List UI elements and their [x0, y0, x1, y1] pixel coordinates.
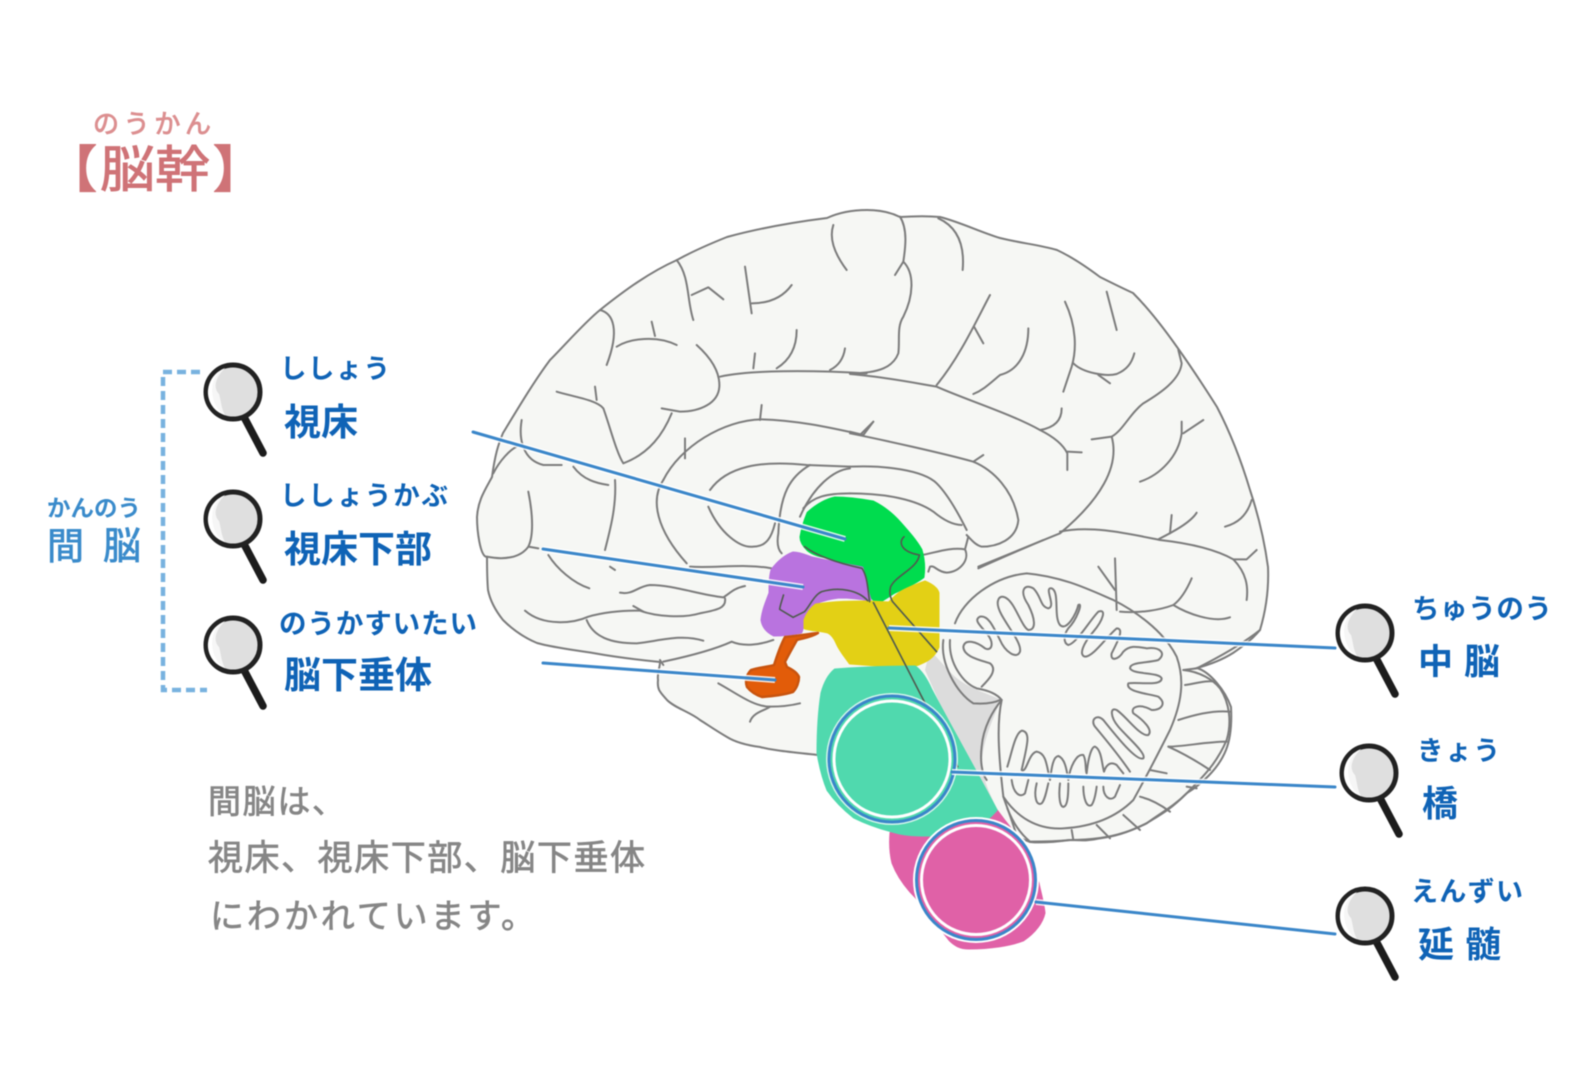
- brain silhouette: [477, 210, 1268, 842]
- magnifier icon: medulla: [1338, 889, 1395, 977]
- cerebellum: [943, 540, 1260, 842]
- region: hypothalamus: [762, 553, 870, 635]
- note text: [208, 783, 645, 936]
- note text: 視床、視床下部、脳下垂体: [208, 839, 645, 878]
- magnifier icon: hypothalamus: [206, 492, 263, 580]
- label: pituitary: のうかすいたい: [279, 608, 477, 639]
- leader line: medulla: [1036, 902, 1335, 934]
- region: medulla body: [891, 810, 1044, 948]
- leader line: pons: [952, 772, 1335, 787]
- label: thalamus: [280, 354, 390, 443]
- title: のうかん: [93, 109, 211, 139]
- label: pons: [1417, 736, 1500, 824]
- sulci: back and top: [850, 217, 1257, 600]
- region: pituitary: [746, 633, 818, 697]
- note text: 間脳は、: [208, 783, 345, 820]
- fourth ventricle grey area: [925, 650, 1016, 850]
- label: medulla: 延: [1418, 924, 1454, 965]
- label: medulla: [1411, 877, 1523, 965]
- label: diencephalon: 間: [47, 526, 84, 567]
- title: [47, 109, 263, 198]
- title: 【: [47, 142, 97, 198]
- label: midbrain: 中: [1418, 643, 1453, 682]
- label: medulla: 髄: [1465, 924, 1501, 965]
- diencephalon bracket: [163, 372, 207, 690]
- title: 脳幹: [100, 142, 210, 198]
- note text: にわかれています。: [210, 898, 535, 936]
- sulci: front and top: [487, 225, 873, 563]
- label: thalamus: ししょう: [280, 354, 390, 384]
- label: pons: きょう: [1417, 736, 1500, 766]
- leader line: hypothalamus: [543, 549, 803, 587]
- label: medulla: えんずい: [1411, 877, 1523, 907]
- label: midbrain: 脳: [1464, 641, 1500, 682]
- label: diencephalon: [47, 495, 141, 568]
- label: midbrain: [1412, 593, 1552, 682]
- magnifier icon: midbrain: [1338, 606, 1395, 694]
- label: pituitary: 脳下垂体: [284, 655, 432, 696]
- label: hypothalamus: 視床下部: [284, 529, 432, 570]
- brain illustration: [477, 210, 1268, 948]
- region: pons body: [818, 667, 996, 835]
- magnified circle: pons: [826, 693, 958, 825]
- magnifier icon: thalamus: [206, 365, 263, 453]
- label: pituitary: [279, 608, 477, 696]
- region: thalamus: [801, 498, 924, 603]
- leader line: pituitary: [543, 663, 775, 680]
- sulci: lower frontal and temporal: [525, 555, 800, 722]
- internal lines over coloured regions: [780, 537, 958, 767]
- magnifier icon: pons: [1342, 746, 1399, 834]
- label: hypothalamus: ししょうかぶ: [280, 481, 448, 511]
- label: diencephalon: 脳: [103, 526, 141, 568]
- leader line: thalamus: [473, 432, 845, 539]
- label: hypothalamus: [280, 481, 448, 570]
- label: pons: 橋: [1422, 783, 1458, 824]
- magnified circle: medulla: [913, 817, 1039, 943]
- label: thalamus: 視床: [284, 402, 358, 443]
- label: midbrain: ちゅうのう: [1412, 593, 1552, 624]
- title: 】: [213, 142, 263, 198]
- label: diencephalon: かんのう: [47, 495, 141, 521]
- leader line: midbrain: [889, 628, 1335, 648]
- region: midbrain: [805, 582, 938, 667]
- magnifier icon: pituitary: [206, 618, 263, 706]
